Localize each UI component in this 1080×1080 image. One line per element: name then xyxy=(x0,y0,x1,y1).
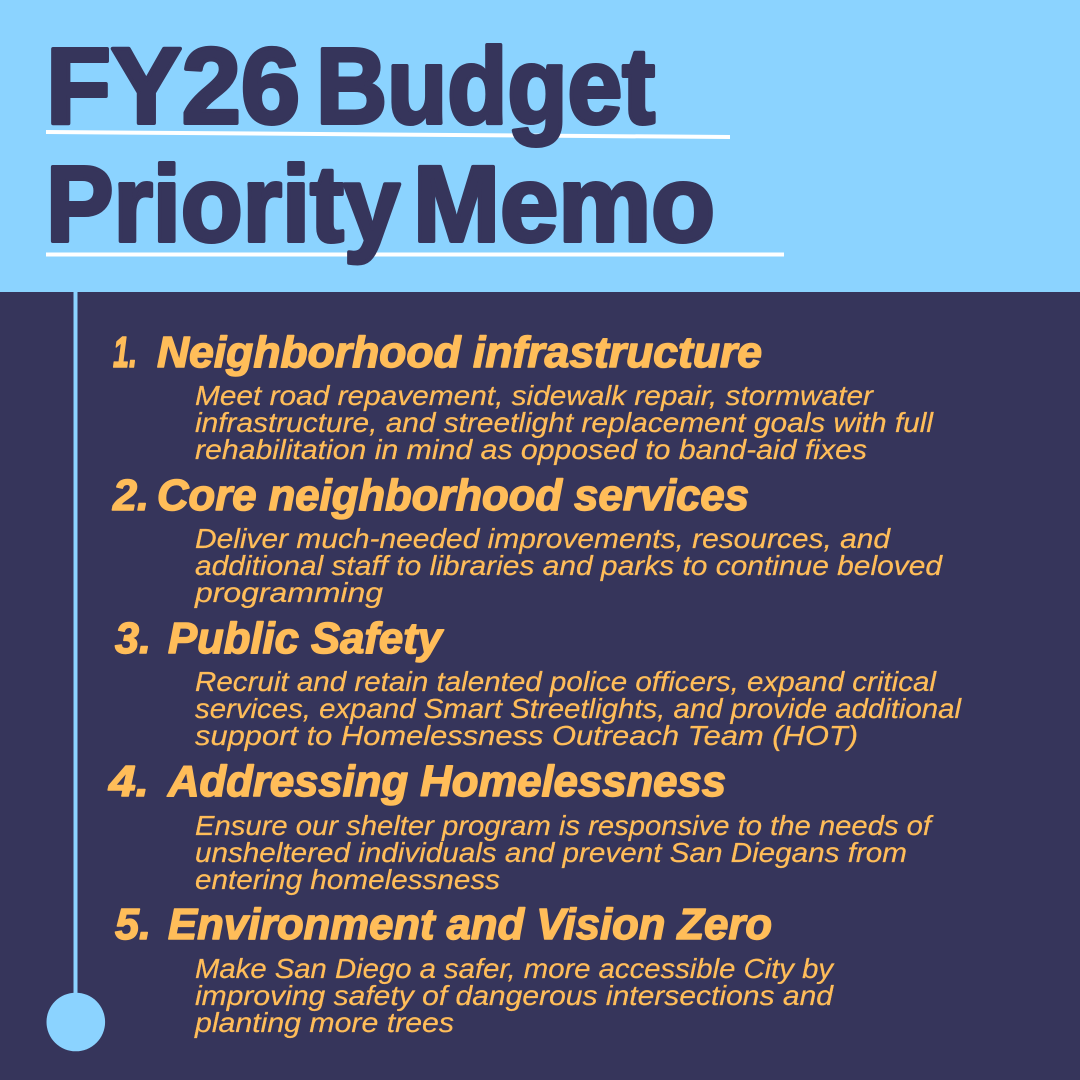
item 3: support to Homelessness Outreach Team (HOT) xyxy=(195,720,858,751)
item 1: rehabilitation in mind as opposed to band-aid fixes xyxy=(195,434,867,465)
item 2 xyxy=(112,471,944,608)
item 4: 4. xyxy=(108,757,149,806)
item 3 xyxy=(115,614,962,751)
item 1: 1. xyxy=(113,328,137,377)
title underlines xyxy=(46,132,784,254)
item 3: Recruit and retain talented police officers, expand critical xyxy=(195,666,937,697)
item 3: 3. xyxy=(115,614,151,663)
item 4 xyxy=(108,757,934,895)
item 4: Addressing Homelessness xyxy=(167,757,726,806)
item 4: Ensure our shelter program is responsive to the needs of xyxy=(195,810,934,841)
item 5: planting more trees xyxy=(194,1007,454,1038)
item 2: programming xyxy=(194,577,383,608)
item 5 xyxy=(115,900,835,1038)
item 5: improving safety of dangerous intersections and xyxy=(195,980,835,1011)
item 2: Deliver much-needed improvements, resources, and xyxy=(195,523,892,554)
item 1: Meet road repavement, sidewalk repair, stormwater xyxy=(195,380,875,411)
item 4: unsheltered individuals and prevent San Diegans from xyxy=(195,837,907,868)
item 3: Public Safety xyxy=(168,614,445,663)
title: Priority xyxy=(46,143,400,264)
item 1: Neighborhood infrastructure xyxy=(157,328,762,377)
title: Memo xyxy=(413,143,715,264)
item 2: 2. xyxy=(112,471,149,520)
header band xyxy=(0,0,1080,292)
item 3: services, expand Smart Streetlights, and provide additional xyxy=(195,693,962,724)
body panel xyxy=(0,292,1080,1080)
item 5: Make San Diego a safer, more accessible City by xyxy=(195,953,835,984)
item 2: Core neighborhood services xyxy=(157,471,749,520)
title: FY26 xyxy=(46,25,300,146)
item 1 xyxy=(113,328,934,465)
timeline xyxy=(47,292,105,1051)
item 5: 5. xyxy=(115,900,151,949)
item 4: entering homelessness xyxy=(195,864,500,895)
title xyxy=(46,25,715,264)
item 2: additional staff to libraries and parks to continue beloved xyxy=(195,550,944,581)
title: Budget xyxy=(316,25,655,146)
item 1: infrastructure, and streetlight replacement goals with full xyxy=(195,407,934,438)
item 5: Environment and Vision Zero xyxy=(168,900,772,949)
